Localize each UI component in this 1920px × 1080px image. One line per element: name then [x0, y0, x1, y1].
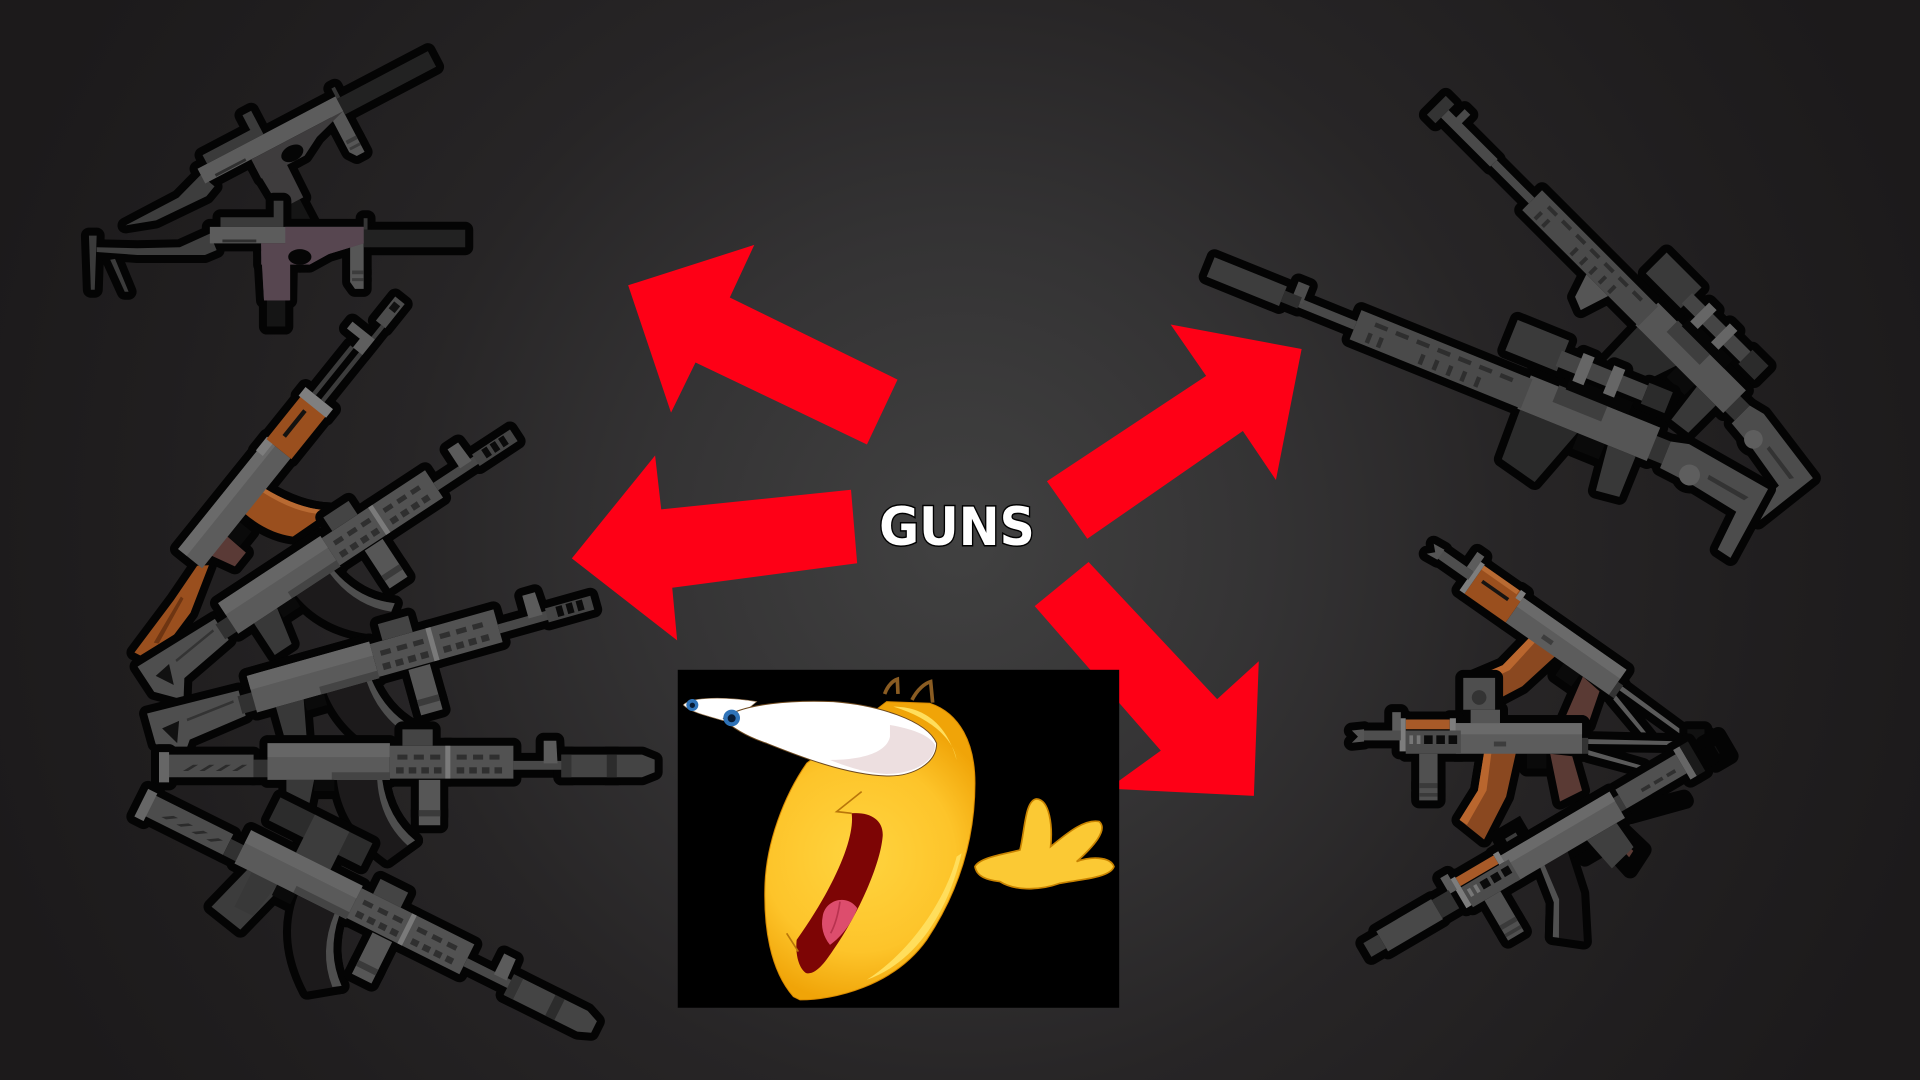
picture: laughing emoji on black [678, 670, 1119, 1008]
arrow: left [572, 456, 857, 640]
tongue [822, 900, 857, 945]
mouth [796, 813, 883, 973]
gun: horizontal submachine gun [89, 201, 465, 327]
arrow: up left [628, 245, 898, 444]
gun: short rifle with wood magazine angled [1371, 529, 1733, 835]
emoji artwork [683, 679, 1114, 1000]
gun: suppressed rifle angled down [99, 743, 623, 1080]
eye shade [830, 725, 935, 774]
gun: short horizontal rifle with optic [1352, 678, 1704, 840]
gun: upper left diagonal submachine gun [105, 25, 473, 300]
right lower gun cluster [1351, 529, 1774, 1038]
gun: scoped suppressed rifle [1181, 206, 1792, 564]
arrow: down right [1035, 562, 1259, 796]
eyebrows [885, 679, 933, 703]
title: guns: GUNS [879, 497, 1035, 558]
tongue crease [831, 902, 840, 933]
right upper gun cluster [1181, 64, 1853, 564]
gun: scoped rifle pointing up left [1387, 64, 1853, 529]
back eye [683, 698, 757, 721]
black image backdrop [678, 670, 1119, 1008]
smile crease [787, 792, 862, 952]
face highlight [867, 707, 962, 980]
hand [975, 799, 1114, 889]
pupils [686, 699, 698, 711]
front eye [723, 701, 937, 776]
gun: grey rifle with grip [141, 567, 619, 822]
face [765, 702, 975, 1000]
left gun cluster [89, 25, 655, 1080]
gun: wood furniture assault rifle [105, 286, 461, 693]
gun: suppressed horizontal rifle [159, 729, 655, 861]
gun: short suppressed rifle with dark magazine [1351, 714, 1774, 1038]
arrow: up right [1047, 324, 1302, 539]
gun: grey rifle angled steeply [125, 405, 566, 757]
